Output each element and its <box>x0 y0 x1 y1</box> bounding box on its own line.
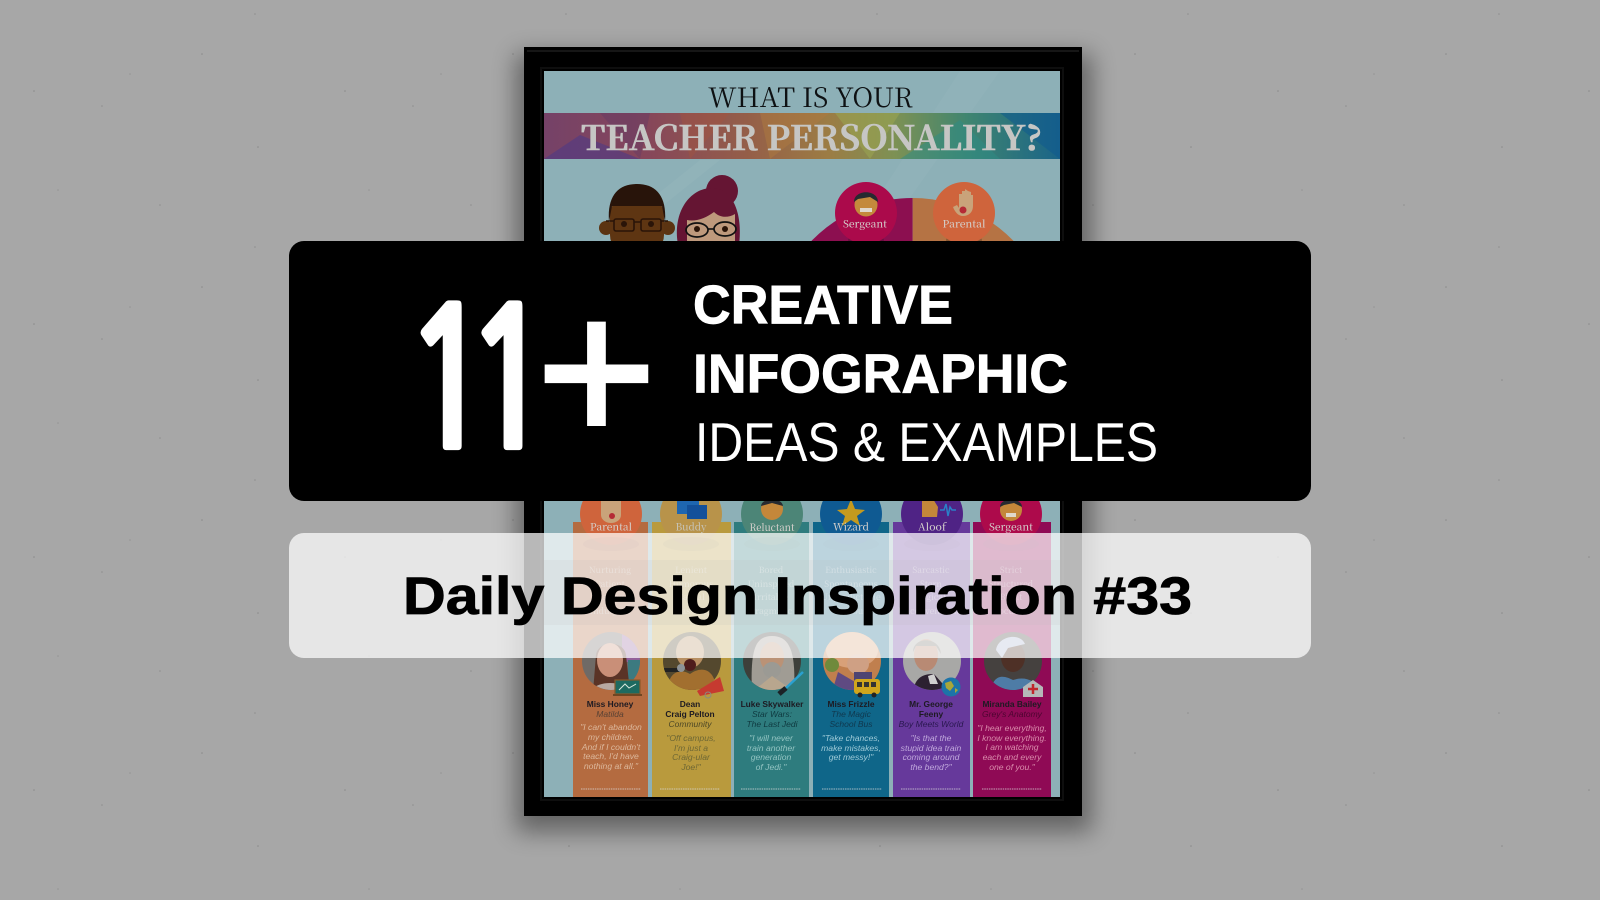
picture frame <box>524 47 1082 816</box>
column: Aloof: Stern <box>920 578 942 590</box>
big number 11+ <box>402 257 656 486</box>
text: Miranda Bailey: Grey's Anatomy <box>982 709 1043 719</box>
illustration: male teacher <box>599 184 675 241</box>
big number 11+: + <box>537 257 656 486</box>
text: Miss Honey: my children. <box>588 732 634 742</box>
text: Luke Skywalker: Star Wars: <box>752 709 793 719</box>
column: Buddy <box>652 483 731 797</box>
portrait: Dean Craig Pelton <box>663 632 721 690</box>
text: Mr. George Feeny: stupid idea train <box>901 743 962 753</box>
text: Dean Craig Pelton: I'm just a <box>674 743 708 753</box>
text: Mr. George Feeny: the bend?" <box>910 762 953 772</box>
text: Miranda Bailey: I am watching <box>985 742 1039 752</box>
text: Mr. George Feeny: "Is that the <box>911 733 952 743</box>
translucent subtitle panel <box>289 533 1311 658</box>
badge: Parental <box>933 182 995 244</box>
poster title: WHAT IS YOUR <box>708 76 913 115</box>
column: Sergeant: Structured <box>989 578 1034 590</box>
text: Miss Honey: "I can't abandon <box>580 722 642 732</box>
icon: lightsaber <box>779 672 803 694</box>
column: Buddy: Lenient <box>675 564 708 576</box>
text: Dean Craig Pelton: Community <box>669 719 712 729</box>
column: Reluctant: Uninspired <box>748 578 795 590</box>
column: Wizard <box>813 483 889 797</box>
character photos and icons <box>582 632 1043 698</box>
column: Parental: Parental <box>590 518 633 534</box>
icon: globe <box>942 678 960 696</box>
column: Reluctant: Bored <box>759 564 784 576</box>
column: Parental: Caring <box>596 591 624 603</box>
big number 11+: 1 <box>463 287 556 478</box>
text: Miss Frizzle: make mistakes, <box>821 743 881 753</box>
icon: hospital <box>1023 680 1043 697</box>
text: Luke Skywalker: The Last Jedi <box>746 719 799 729</box>
text: Miss Frizzle: "Take chances, <box>822 733 880 743</box>
personality wheel <box>812 182 1014 241</box>
column: Aloof: Sarcastic <box>912 564 950 576</box>
column: Buddy: Humorous <box>669 578 713 590</box>
headline: IDEAS & EXAMPLES: IDEAS & EXAMPLES <box>695 411 1158 473</box>
column: Aloof: Aloof <box>918 518 947 534</box>
text: Mr. George Feeny: Feeny <box>919 709 943 719</box>
column: Parental: Indulgent <box>590 605 631 617</box>
text: Miranda Bailey: Miranda Bailey <box>982 699 1042 709</box>
column: Reluctant <box>734 483 809 797</box>
text: Dean Craig Pelton: Craig-ular <box>672 752 711 762</box>
column: Reluctant: Pragmatic <box>750 605 793 617</box>
column: Parental: Patient <box>595 578 626 590</box>
text: Miss Honey: Miss Honey <box>587 699 634 709</box>
column: Sergeant <box>973 483 1051 797</box>
text: Mr. George Feeny: Boy Meets World <box>899 719 964 729</box>
character text <box>580 699 1047 789</box>
text: Miss Frizzle <box>821 699 881 762</box>
column: Buddy: Casual <box>677 591 705 603</box>
text: Dean Craig Pelton: "Off campus, <box>666 733 716 743</box>
illustration: female teacher <box>677 175 740 245</box>
badge: Parental: Parental <box>942 216 986 230</box>
column: Wizard: Unpredictable <box>821 591 881 603</box>
text: Miss Frizzle: The Magic <box>831 709 872 719</box>
icon: megaphone <box>697 677 724 698</box>
text: Luke Skywalker: train another <box>747 743 796 753</box>
text: Miranda Bailey <box>977 699 1047 772</box>
portrait: Miranda Bailey <box>984 632 1042 692</box>
text: Miss Frizzle: get messy!" <box>829 752 874 762</box>
text: Dean Craig Pelton: Dean <box>680 699 700 709</box>
column: Parental: Nurturing <box>589 564 631 576</box>
text: Dean Craig Pelton: Joe!" <box>680 762 702 772</box>
column: Reluctant: Irritable <box>754 591 789 603</box>
text: Miss Honey: Matilda <box>596 709 624 719</box>
text: Dean Craig Pelton: Craig Pelton <box>665 709 715 719</box>
personality columns <box>573 483 1051 797</box>
text: Luke Skywalker: of Jedi." <box>756 762 787 772</box>
text: Miranda Bailey: each and every <box>983 752 1042 762</box>
column: Wizard: Spontaneous <box>824 578 878 590</box>
text: Miss Honey: teach, I'd have <box>583 751 639 761</box>
text: Luke Skywalker: Luke Skywalker <box>741 699 804 709</box>
portrait: Miss Honey <box>582 632 640 692</box>
framed poster <box>516 47 1092 832</box>
column: Buddy: Buddy <box>676 518 707 534</box>
column: Sergeant: Strict <box>1000 564 1023 576</box>
portrait: Mr. George Feeny <box>903 632 961 692</box>
column: Aloof <box>893 483 970 797</box>
text: Miss Honey: And if I couldn't <box>581 742 641 752</box>
portrait: Miss Frizzle <box>823 632 881 692</box>
column: Sergeant: Focused <box>994 605 1029 617</box>
text: Mr. George Feeny <box>899 699 964 772</box>
text: Miss Frizzle: School Bus <box>830 719 873 729</box>
column: Aloof: Unconventional <box>898 605 964 617</box>
badge: Sergeant: Sergeant <box>843 216 887 230</box>
column: Parental <box>573 483 648 797</box>
column: Wizard: Curious <box>835 605 867 617</box>
black title panel <box>289 241 1311 501</box>
column: Sergeant: Sergeant <box>989 518 1033 534</box>
text: Mr. George Feeny: Mr. George <box>909 699 953 709</box>
icon: chalkboard <box>613 680 642 696</box>
poster artwork <box>544 71 1060 797</box>
column: Buddy: Passive <box>676 605 706 617</box>
text: Mr. George Feeny: coming around <box>903 752 960 762</box>
text: Dean Craig Pelton <box>665 699 716 772</box>
headline: CREATIVE: CREATIVE <box>693 274 953 336</box>
column: Wizard: Wizard <box>833 518 870 534</box>
big number 11+: 1 <box>402 287 496 478</box>
headline: INFOGRAPHIC: INFOGRAPHIC <box>693 342 1068 404</box>
rainbow title band: TEACHER PERSONALITY? <box>581 111 1042 160</box>
text: Miss Honey <box>580 699 642 771</box>
badge: Sergeant <box>835 182 897 244</box>
column: Reluctant: Reluctant <box>750 519 795 534</box>
text: Miranda Bailey: one of you." <box>989 762 1036 772</box>
text: Luke Skywalker <box>741 699 804 772</box>
text: Miranda Bailey: "I hear everything, <box>977 723 1047 733</box>
text: Luke Skywalker: generation <box>751 752 792 762</box>
column: Sergeant: Blunt <box>1000 591 1023 603</box>
column: Aloof: Logical <box>916 591 946 603</box>
text: Miss Honey: nothing at all." <box>584 761 639 771</box>
icon: school bus <box>854 679 880 698</box>
text: Luke Skywalker: "I will never <box>749 733 794 743</box>
text: Miss Frizzle: Miss Frizzle <box>827 699 875 709</box>
column: Wizard: Enthusiastic <box>825 564 877 576</box>
frame shadow <box>516 54 1092 832</box>
subtitle text: Daily Design Inspiration #33 <box>403 567 1192 626</box>
portrait: Luke Skywalker <box>743 632 801 692</box>
text: Miranda Bailey: I know everything. <box>977 733 1047 743</box>
